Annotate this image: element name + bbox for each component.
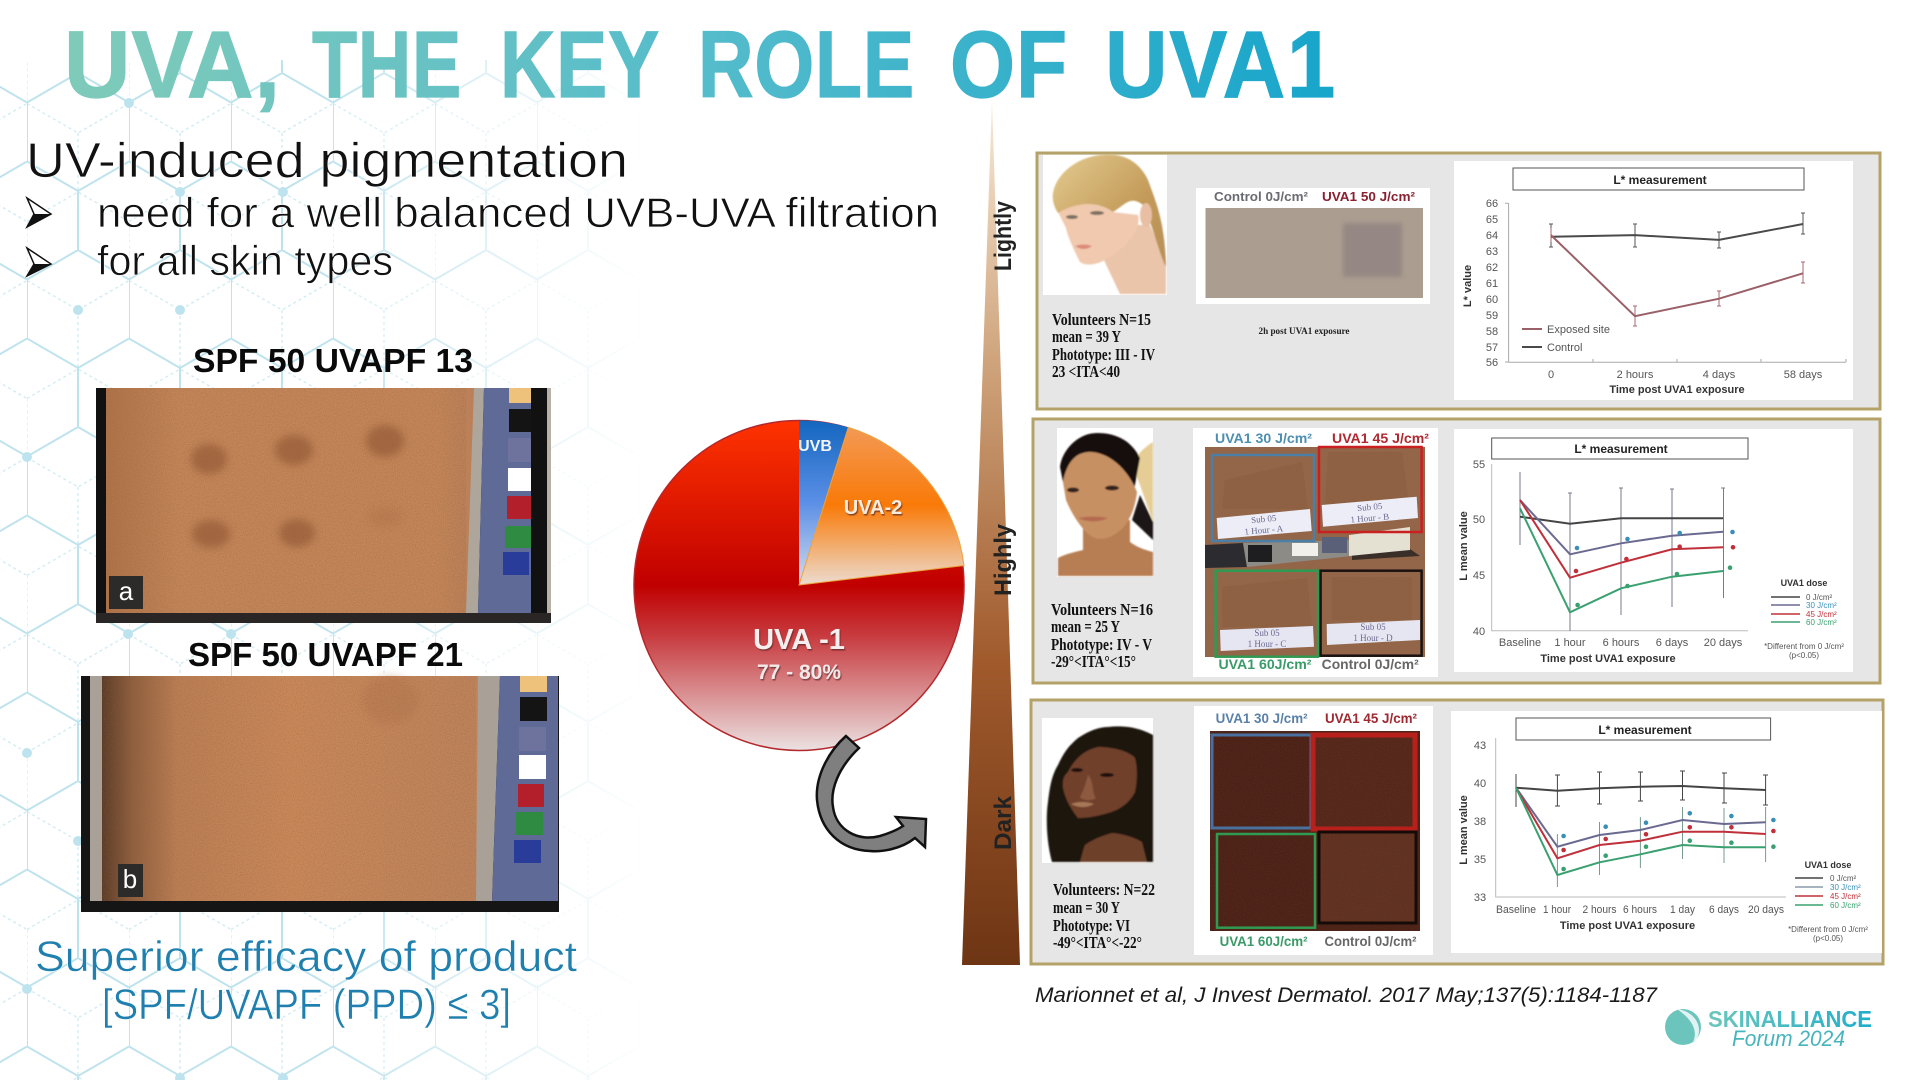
label UVB: UVB	[798, 438, 832, 455]
skin sample photo: UVA1 45 J/cm²	[1332, 431, 1430, 446]
volunteer details: Phototype: VI	[1053, 916, 1130, 935]
chart legend: (p<0.05)	[1813, 934, 1843, 943]
title: OF	[950, 12, 1068, 118]
photo a: pigmented skin	[96, 388, 551, 623]
line chart: L* measurement: 1 hour	[1554, 637, 1586, 649]
line chart: L* measurement: 63	[1486, 246, 1498, 258]
line chart: L* measurement: 65	[1486, 214, 1498, 226]
wedge label Dark: Dark	[990, 795, 1017, 850]
volunteer details: -29°<ITA°<15°	[1051, 652, 1136, 671]
portrait: blonde	[1043, 155, 1167, 295]
chart legend	[1764, 578, 1844, 660]
bullet arrow 2	[27, 248, 51, 276]
line chart: L* measurement: 6 hours	[1623, 904, 1657, 916]
line chart: L* measurement: L* value	[1462, 265, 1474, 307]
title: THE	[312, 12, 462, 118]
volunteer details: mean = 39 Y	[1052, 327, 1121, 346]
line chart: L* measurement: 1 hour	[1543, 904, 1571, 916]
sample card A: 1 Hour - A	[1244, 523, 1284, 537]
title	[64, 12, 1337, 118]
line chart: L* measurement: 58	[1486, 326, 1498, 338]
skin sample photo: UVA1 30 J/cm²	[1216, 711, 1308, 726]
skin sample photo: UVA1 50 J/cm²	[1322, 189, 1416, 204]
line chart: L* measurement: 56	[1486, 357, 1498, 369]
volunteer details: mean = 30 Y	[1053, 898, 1120, 917]
line chart: L* measurement: 6 days	[1709, 904, 1739, 916]
line chart: L* measurement: 55	[1473, 459, 1485, 471]
sample card D	[1327, 620, 1420, 645]
line chart: L* measurement: L* measurement	[1574, 442, 1668, 456]
panel: dark pigmented	[1031, 700, 1883, 964]
line chart: L* measurement: 57	[1486, 342, 1498, 354]
line chart: L* measurement: 59	[1486, 310, 1498, 322]
label UVA-1: UVA -1	[753, 624, 845, 656]
line chart: L* measurement: 6 hours	[1603, 637, 1640, 649]
portrait: dark skin	[1042, 718, 1153, 863]
heading: SPF 50 UVAPF 13: SPF 50 UVAPF 13	[193, 342, 473, 379]
title: KEY	[500, 12, 660, 118]
pie chart: UV spectrum	[634, 420, 964, 750]
volunteer details	[1053, 880, 1155, 952]
chart legend: 30 J/cm²	[1806, 601, 1837, 610]
slice: UVB	[799, 420, 848, 585]
line chart: L* measurement: 20 days	[1748, 904, 1784, 916]
line chart: L* measurement: 66	[1486, 198, 1498, 210]
bullet arrow 1	[27, 198, 51, 227]
sample card B: 1 Hour - B	[1350, 511, 1389, 525]
line chart: L* measurement	[1451, 711, 1882, 953]
line chart: L* measurement: 2 hours	[1582, 904, 1617, 916]
intro heading: UV-induced pigmentation	[26, 134, 628, 188]
sample card C: Sub 05	[1254, 628, 1280, 638]
volunteer details: 23 <ITA<40	[1052, 362, 1120, 381]
line chart: L* measurement: L* measurement	[1613, 173, 1707, 187]
chart legend: *Different from 0 J/cm²	[1764, 642, 1844, 651]
label a: a	[119, 576, 134, 606]
line chart: L* measurement: Baseline	[1499, 637, 1541, 649]
panel: lightly pigmented	[1037, 153, 1880, 409]
line chart: L* measurement: 6 days	[1656, 637, 1689, 649]
slice: UVA-2	[799, 427, 964, 585]
line chart: L* measurement: 45	[1473, 570, 1485, 582]
conclusion text	[35, 933, 577, 1029]
colour chart chips	[503, 388, 531, 575]
line chart: L* measurement: Time post UVA1 exposure	[1560, 920, 1695, 932]
skin spots	[191, 425, 404, 548]
skin sample photo: UVA1 60J/cm²	[1220, 934, 1308, 949]
heading: SPF 50 UVAPF 21: SPF 50 UVAPF 21	[188, 636, 463, 673]
volunteer details: Phototype: IV - V	[1051, 635, 1152, 654]
line chart: L* measurement: L mean value	[1458, 795, 1470, 865]
skin sample photo	[1194, 706, 1433, 955]
volunteer details: Volunteers N=16	[1051, 600, 1153, 619]
sample card D: 1 Hour - D	[1353, 633, 1393, 643]
chart legend: 0 J/cm²	[1830, 874, 1857, 883]
chart legend: (p<0.05)	[1789, 651, 1819, 660]
volunteer details	[1051, 600, 1153, 671]
label 77-80%: 77 - 80%	[757, 661, 841, 684]
line chart: L* measurement: 40	[1474, 778, 1486, 790]
line chart: L* measurement: 64	[1486, 230, 1498, 242]
citation: Marionnet et al, J Invest Dermatol. 2017 May;137(5):1184-1187	[1035, 984, 1658, 1007]
line chart: L* measurement: L* measurement	[1598, 723, 1692, 737]
chart legend: 30 J/cm²	[1830, 883, 1861, 892]
chart legend: 60 J/cm²	[1830, 901, 1861, 910]
line chart: L* measurement: 0	[1548, 369, 1554, 381]
panel: highly pigmented	[1033, 419, 1880, 683]
line chart: L* measurement: 43	[1474, 740, 1486, 752]
sample card A	[1217, 509, 1312, 539]
line chart: L* measurement: Time post UVA1 exposure	[1609, 384, 1745, 396]
skin sample photo: UVA1 45 J/cm²	[1325, 711, 1417, 726]
line chart: L* measurement: Exposed site	[1547, 324, 1610, 336]
line chart: L* measurement: 50	[1473, 514, 1485, 526]
skin sample photo	[1196, 188, 1430, 304]
line chart: L* measurement: 58 days	[1784, 369, 1823, 381]
line chart: L* measurement: 61	[1486, 278, 1498, 290]
volunteer details: -49°<ITA°<-22°	[1053, 933, 1142, 952]
wedge label Lightly: Lightly	[990, 200, 1017, 271]
skin sample photo: Control 0J/cm²	[1324, 934, 1417, 949]
line chart: L* measurement	[1454, 161, 1853, 400]
sample card B: Sub 05	[1357, 501, 1383, 513]
label a	[109, 576, 143, 609]
skin sample photo	[1193, 428, 1438, 677]
chart legend: 0 J/cm²	[1806, 593, 1833, 602]
skin sample photo: Control 0J/cm²	[1322, 657, 1419, 672]
sample card C: 1 Hour - C	[1248, 639, 1286, 649]
conclusion text: Superior efficacy of product	[35, 933, 577, 981]
line chart: L* measurement: 35	[1474, 854, 1486, 866]
chart legend	[1788, 860, 1868, 943]
wedge label Highly: Highly	[990, 523, 1017, 596]
chart legend: UVA1 dose	[1781, 578, 1827, 588]
line chart: L* measurement: 1 day	[1670, 904, 1695, 916]
skin sample photo: UVA1 60J/cm²	[1218, 657, 1312, 672]
label b: b	[123, 864, 137, 894]
line chart: L* measurement: Control	[1547, 342, 1582, 354]
line chart: L* measurement: 60	[1486, 294, 1498, 306]
line chart: L* measurement: 40	[1473, 626, 1485, 638]
label b	[118, 864, 143, 897]
skin sample photo: UVA1 30 J/cm²	[1215, 431, 1313, 446]
line chart: L* measurement: Time post UVA1 exposure	[1540, 653, 1676, 665]
line chart: L* measurement: 38	[1474, 816, 1486, 828]
chart legend: 45 J/cm²	[1830, 892, 1861, 901]
line chart: L* measurement	[1454, 429, 1853, 672]
curved arrow	[817, 736, 926, 851]
line chart: L* measurement: Baseline	[1496, 904, 1536, 916]
logo wordmark: SKINALLIANCE	[1708, 1006, 1872, 1032]
line chart: L* measurement: 62	[1486, 262, 1498, 274]
bullet text 1: need for a well balanced UVB-UVA filtration	[97, 189, 939, 236]
volunteer details	[1052, 310, 1155, 381]
skin sample photo: Control 0J/cm²	[1214, 189, 1309, 204]
intro text block	[26, 134, 939, 284]
line chart: L* measurement: L mean value	[1458, 511, 1470, 581]
volunteer details: mean = 25 Y	[1051, 617, 1120, 636]
logo subtitle: Forum 2024	[1732, 1026, 1845, 1051]
title: ROLE	[698, 12, 915, 118]
volunteer details: Phototype: III - IV	[1052, 345, 1155, 364]
chart legend: 60 J/cm²	[1806, 618, 1837, 627]
chart legend: *Different from 0 J/cm²	[1788, 925, 1868, 934]
line chart: L* measurement: 33	[1474, 892, 1486, 904]
title: UVA,	[64, 12, 281, 118]
sample card D: Sub 05	[1360, 622, 1386, 632]
volunteer details: Volunteers N=15	[1052, 310, 1151, 329]
photo b: protected skin	[81, 676, 559, 912]
line chart: L* measurement: 2 hours	[1617, 369, 1654, 381]
sample card B	[1322, 497, 1418, 527]
chart legend: UVA1 dose	[1805, 860, 1851, 870]
slice: UVA-1	[634, 420, 964, 750]
bullet text 2: for all skin types	[97, 237, 393, 284]
line chart: L* measurement: 20 days	[1704, 637, 1743, 649]
portrait: medium skin	[1057, 428, 1153, 577]
title: UVA1	[1105, 12, 1337, 118]
logo: Skinalliance Forum 2024	[1665, 1006, 1872, 1051]
chart legend: 45 J/cm²	[1806, 610, 1837, 619]
colour chart chips	[514, 676, 547, 863]
skin tone wedge	[962, 100, 1020, 965]
conclusion text: [SPF/UVAPF (PPD) ≤ 3]	[102, 981, 511, 1029]
line chart: L* measurement: 4 days	[1703, 369, 1736, 381]
sample card C	[1220, 626, 1314, 651]
sample card A: Sub 05	[1251, 513, 1277, 525]
logo mark	[1665, 1009, 1701, 1045]
label UVA-2: UVA-2	[844, 497, 902, 519]
exposure caption: 2h post UVA1 exposure	[1258, 326, 1350, 336]
volunteer details: Volunteers: N=22	[1053, 880, 1155, 899]
